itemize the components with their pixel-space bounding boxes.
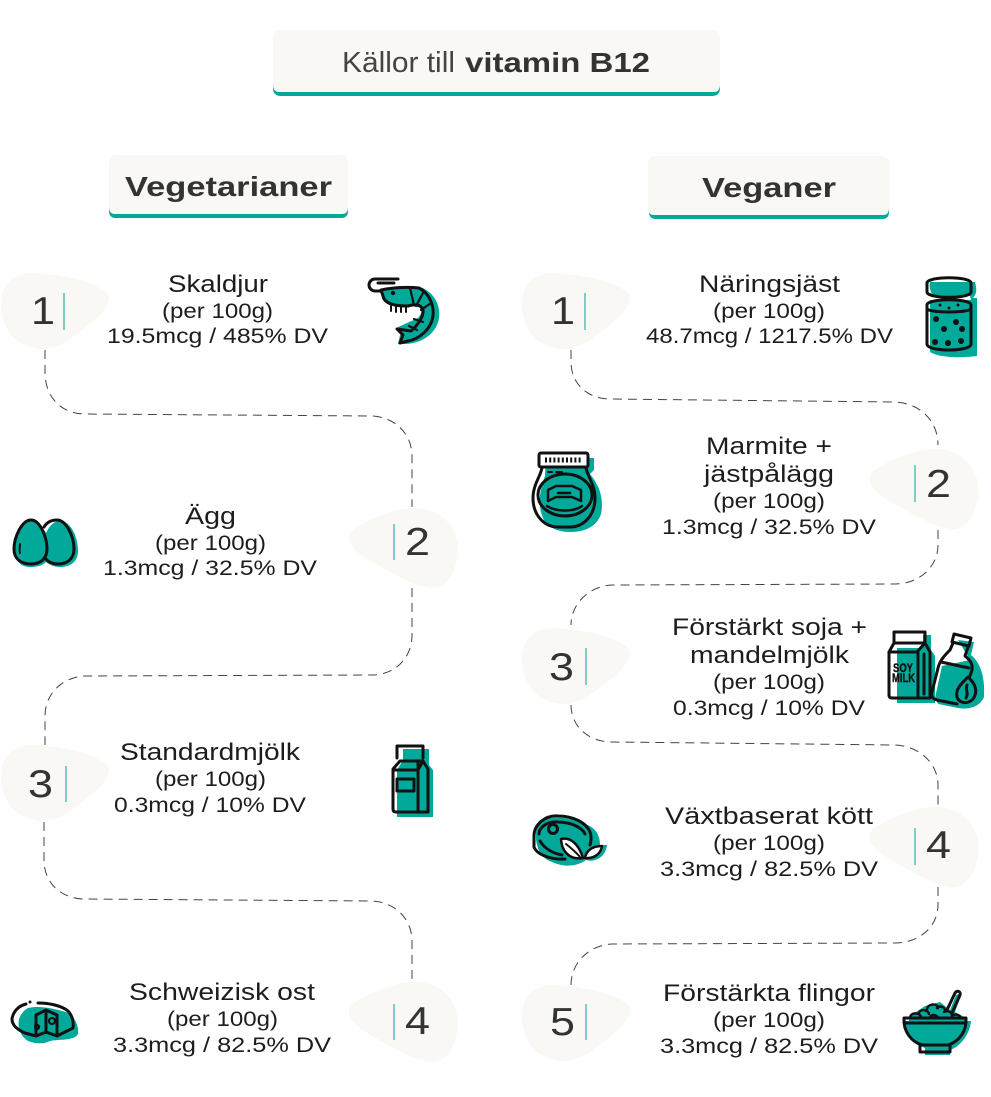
text: Schweizisk ost: Schweizisk ost: [129, 979, 315, 1006]
icon: shrimp: [369, 279, 439, 344]
number badge 2: [870, 449, 978, 529]
number badge 5: [522, 985, 630, 1061]
icon: eggs: [14, 520, 78, 567]
text: Marmite: [662, 433, 876, 539]
connector: vegetarian path: [44, 350, 412, 981]
text: Standardmjölk: [114, 739, 306, 817]
text: Marmite: (per 100g): [713, 490, 825, 513]
text: Växtbaserat kött: [660, 803, 878, 881]
heading: Vegetarianer: [109, 155, 348, 218]
icon: soy milk and almond milk: MILK: [892, 671, 915, 685]
item: Ägg: [14, 503, 458, 588]
text: Näringsjäst: [646, 271, 893, 348]
number badge 4: [870, 807, 978, 887]
text: Förstärkt soja: 0.3mcg / 10% DV: [673, 697, 865, 720]
icon: yeast jar: [927, 278, 977, 357]
text: Skaldjur: Skaldjur: [168, 271, 268, 298]
text: Förstärkta flingor: (per 100g): [713, 1009, 825, 1032]
icon: soy milk and almond milk: SOY: [893, 661, 913, 675]
text: Förstärkta flingor: Förstärkta flingor: [663, 980, 875, 1007]
text: Förstärkt soja: mandelmjölk: [690, 642, 850, 669]
item: Schweizisk ost: [12, 979, 458, 1062]
text: Schweizisk ost: (per 100g): [167, 1008, 278, 1031]
text: Förstärkta flingor: [660, 980, 878, 1058]
icon: cereal bowl: [904, 991, 971, 1055]
number badge 3: 3: [28, 763, 53, 806]
text: Marmite: jästpålägg: [703, 461, 834, 488]
text: Schweizisk ost: [113, 979, 331, 1057]
title: Källor till: [342, 47, 455, 79]
number badge 3: [1, 745, 109, 821]
text: Förstärkta flingor: 3.3mcg / 82.5% DV: [660, 1035, 878, 1058]
icon: marmite jar: [533, 453, 602, 532]
text: Förstärkt soja: [672, 614, 867, 720]
icon: cheese: [12, 1000, 78, 1043]
icon: milk carton: [393, 746, 433, 817]
text: Schweizisk ost: 3.3mcg / 82.5% DV: [113, 1034, 331, 1057]
text: Marmite: Marmite +: [706, 433, 832, 460]
text: Förstärkt soja: (per 100g): [713, 671, 825, 694]
number badge 5: 5: [550, 1001, 575, 1044]
number badge 1: 1: [551, 290, 575, 333]
text: Växtbaserat kött: 3.3mcg / 82.5% DV: [660, 858, 878, 881]
title: [273, 30, 720, 96]
text: Ägg: Ägg: [185, 503, 236, 530]
icon: plant-based steak: [534, 816, 607, 866]
heading: Veganer: Veganer: [702, 172, 836, 203]
heading: Veganer: [648, 156, 889, 219]
text: Förstärkt soja: Förstärkt soja +: [672, 614, 867, 641]
text: Marmite: 1.3mcg / 32.5% DV: [662, 516, 876, 539]
number badge 4: [349, 982, 458, 1062]
text: Näringsjäst: (per 100g): [713, 300, 825, 323]
heading: Vegetarianer: Vegetarianer: [125, 171, 332, 202]
item: Standardmjölk: [1, 739, 433, 821]
number badge 1: 1: [31, 290, 55, 333]
number badge 2: 2: [926, 463, 951, 506]
text: Näringsjäst: 48.7mcg / 1217.5% DV: [646, 325, 893, 348]
number badge 2: 2: [405, 521, 430, 564]
text: Ägg: 1.3mcg / 32.5% DV: [103, 557, 317, 580]
text: Skaldjur: [107, 271, 328, 348]
number badge 4: 4: [405, 1000, 430, 1043]
title: vitamin B12: [465, 47, 650, 78]
text: Standardmjölk: Standardmjölk: [120, 739, 301, 766]
item: Näringsjäst: [522, 271, 977, 357]
text: Näringsjäst: Näringsjäst: [699, 271, 840, 298]
text: Ägg: (per 100g): [155, 532, 266, 555]
text: Växtbaserat kött: (per 100g): [713, 832, 825, 855]
number badge 1: [1, 273, 109, 349]
connector: vegan path: [571, 350, 938, 985]
text: Skaldjur: 19.5mcg / 485% DV: [107, 325, 328, 348]
item: Förstärkt soja + mandelmjölk: [522, 614, 984, 720]
text: Skaldjur: (per 100g): [162, 300, 273, 323]
icon: soy milk and almond milk: [889, 632, 984, 709]
number badge 3: 3: [549, 646, 574, 689]
text: Ägg: [103, 503, 317, 580]
item: Marmite + jästpålägg: [533, 433, 978, 539]
item: Växtbaserat kött: [534, 803, 978, 887]
number badge 2: [349, 508, 458, 588]
number badge 1: [522, 273, 630, 349]
number badge 3: [522, 628, 630, 704]
text: Standardmjölk: 0.3mcg / 10% DV: [114, 794, 306, 817]
number badge 4: 4: [926, 824, 951, 867]
text: Växtbaserat kött: Växtbaserat kött: [665, 803, 873, 830]
item: Förstärkta flingor: [522, 980, 971, 1061]
item: Skaldjur: [1, 271, 439, 349]
text: Standardmjölk: (per 100g): [155, 768, 266, 791]
